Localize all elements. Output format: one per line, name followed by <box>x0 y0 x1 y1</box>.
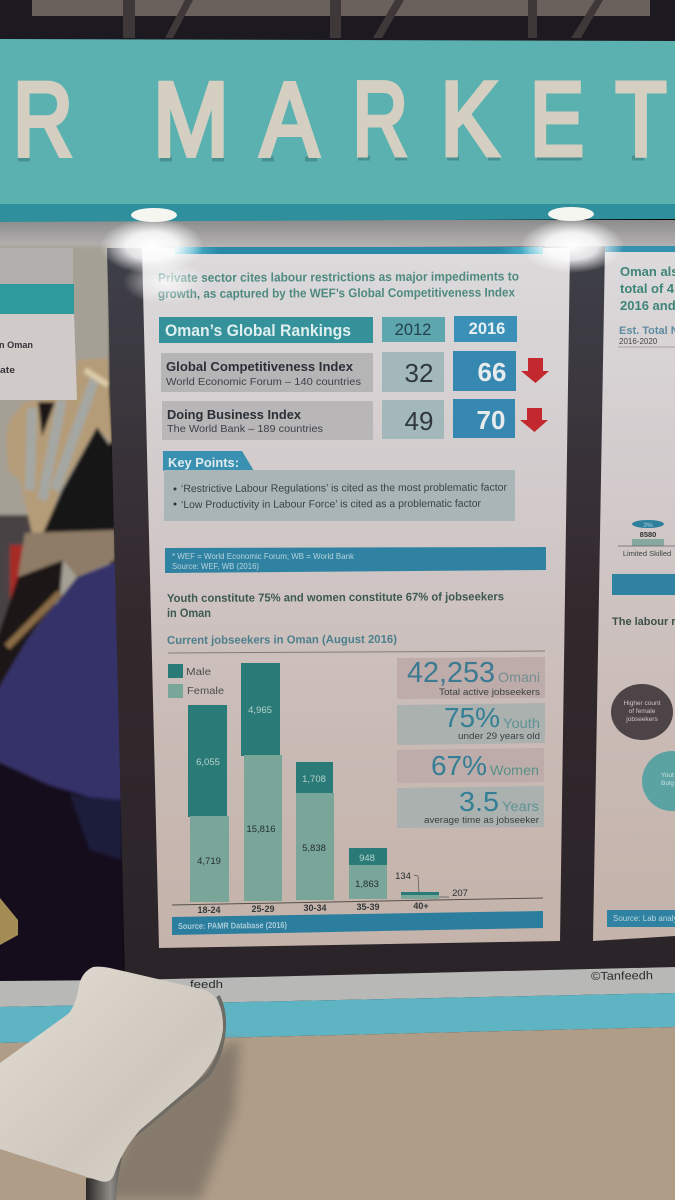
age axis labels: 25-29 <box>251 904 275 914</box>
bar chart: jobseekers by age <box>168 663 543 915</box>
bubble: youth bulge: Bulg <box>661 780 674 787</box>
icon: brass object on left <box>0 898 18 945</box>
sign: teal fascia with lettering <box>0 39 675 222</box>
dark backing frame <box>107 246 675 980</box>
row: Global Competitiveness Index: Global Competitiveness Index <box>166 359 354 374</box>
key points: ‘Low Productivity in Labour Force’ is cited as a problematic factor <box>181 498 481 511</box>
left poster: text callout: n Oman <box>0 340 33 351</box>
right panel: The labour r <box>612 616 675 628</box>
sign lettering: R <box>13 62 73 178</box>
bar: 18-24: 6,055 <box>196 757 220 768</box>
right panel bar: limited skilled: Limited Skilled <box>623 549 671 558</box>
stat: total jobseekers: Total active jobseekers <box>439 687 540 698</box>
stat: total jobseekers <box>397 657 545 699</box>
stool shadow <box>100 1040 240 1200</box>
bar: 35-39: 1,863 <box>355 879 379 890</box>
teal floor band <box>0 993 675 1043</box>
key points: ‘Restrictive Labour Regulations’ is cited as the most problematic factor <box>181 482 507 495</box>
bar: 40+ <box>395 871 468 899</box>
age axis labels: 40+ <box>413 901 429 911</box>
bottom caption strip <box>0 967 675 1007</box>
bottom caption strip: feedh <box>190 979 223 991</box>
stat: total jobseekers: Omani <box>498 669 540 685</box>
bar: 30-34: 5,838 <box>302 843 326 854</box>
intro text: Private sector cites labour restrictions as major impediments to <box>158 269 519 285</box>
lamp: left <box>131 208 177 222</box>
bubble: youth bulge: Yout <box>661 772 674 779</box>
legend: Female <box>187 685 224 697</box>
dark lower background <box>0 760 125 985</box>
row: Doing Business Index: 49 <box>405 406 433 436</box>
intro text <box>158 269 519 301</box>
right panel: 2016-2020 <box>619 337 658 346</box>
right panel bar: limited skilled: 3% <box>643 522 653 529</box>
row: Doing Business Index <box>162 399 548 440</box>
right panel source bar <box>607 910 675 927</box>
table header <box>159 316 517 343</box>
bubble: youth bulge <box>642 751 675 811</box>
bottom caption strip: ©Tanfeedh <box>591 970 653 983</box>
lamp glow on wall and posters <box>100 218 624 304</box>
bubble: female jobseekers: of female <box>629 708 656 715</box>
row: Global Competitiveness Index <box>161 351 549 392</box>
source bar: WEF, WB: Source: WEF, WB (2016) <box>172 561 259 571</box>
left poster: text callout <box>0 248 77 400</box>
bar: 25-29 <box>241 663 282 901</box>
stat: years: 3.5 <box>459 786 499 817</box>
lamp: right <box>548 207 594 221</box>
lower scarf <box>18 530 116 577</box>
table header: 2016 <box>469 320 505 338</box>
source bar: PAMR: Source: PAMR Database (2016) <box>178 920 287 931</box>
row: Global Competitiveness Index: 32 <box>405 358 433 388</box>
top accent bar <box>175 247 543 254</box>
bar: 35-39 <box>349 848 387 899</box>
beige lower wall <box>0 1027 675 1200</box>
stat: years: average time as jobseeker <box>424 815 539 826</box>
bar: 30-34: 1,708 <box>302 774 326 785</box>
source bar: WEF, WB <box>165 547 546 573</box>
bar: 35-39: 948 <box>359 853 375 864</box>
right panel bar: limited skilled <box>618 520 675 558</box>
heading: youth and women: Youth constitute 75% and women constitute 67% of jobseekers <box>167 591 504 605</box>
age axis labels: 18-24 <box>197 905 221 915</box>
bar: 25-29: 15,816 <box>246 824 276 835</box>
bar: 40+: 134 <box>395 871 411 882</box>
bar: 25-29: 4,965 <box>248 705 272 716</box>
chart title: Current jobseekers in Oman (August 2016) <box>167 634 397 647</box>
heading: youth and women: in Oman <box>167 608 211 620</box>
row: Doing Business Index: Doing Business Index <box>167 407 302 422</box>
sign lettering: A <box>260 62 318 178</box>
bar: 30-34 <box>296 762 334 900</box>
sign lettering: K <box>440 61 498 178</box>
right panel headings: total of 4 <box>620 281 675 296</box>
right panel headings <box>620 264 675 313</box>
black under-scarf <box>43 427 116 533</box>
stat: youth: 75% <box>444 702 500 733</box>
stat: years: Years <box>502 798 539 814</box>
stat: women <box>397 748 544 783</box>
sign lettering <box>13 61 666 178</box>
source bar: PAMR <box>172 911 543 935</box>
ceiling <box>0 0 675 42</box>
white stool <box>0 967 224 1200</box>
row: Doing Business Index: The World Bank – 189 countries <box>167 423 323 435</box>
table header: Oman’s Global Rankings <box>165 321 351 340</box>
centre panel <box>142 247 570 948</box>
icon: red down arrow <box>520 408 548 432</box>
intro text: growth, as captured by the WEF’s Global Competitiveness Index <box>158 285 515 301</box>
bar: 18-24 <box>188 705 229 902</box>
right panel headings: 2016 and <box>620 298 675 313</box>
bar: 40+: 207 <box>452 888 468 899</box>
stool chrome edge <box>135 996 224 1135</box>
stool leg <box>86 1130 130 1200</box>
sign lettering: R <box>352 61 408 178</box>
head scarf <box>6 358 113 533</box>
sign lettering: E <box>530 61 584 178</box>
row: Global Competitiveness Index: World Economic Forum – 140 countries <box>166 376 361 388</box>
bubble: female jobseekers: jobseekers <box>625 716 658 723</box>
sign lettering shadow <box>18 158 644 159</box>
left poster: text callout: ate <box>0 365 15 376</box>
legend: Male <box>186 666 211 678</box>
stat: years <box>397 786 544 828</box>
sign lettering: M <box>153 62 229 178</box>
bubble: female jobseekers <box>611 684 673 740</box>
source bar: WEF, WB: * WEF = World Economic Forum; WB = World Bank <box>172 551 355 561</box>
age axis labels: 30-34 <box>303 903 327 913</box>
stool seat <box>0 967 223 1182</box>
stat: women: 67% <box>431 750 487 781</box>
stat: youth: under 29 years old <box>458 731 540 742</box>
row: Global Competitiveness Index: 66 <box>478 357 506 387</box>
age axis labels: 35-39 <box>356 902 380 912</box>
right panel bar: limited skilled: 8580 <box>640 530 656 539</box>
wall beneath sign <box>0 220 675 250</box>
icon: red down arrow <box>521 358 549 383</box>
table header: 2012 <box>395 321 431 339</box>
stat: youth <box>397 702 545 745</box>
key points: Key Points: <box>168 455 239 470</box>
heading: youth and women <box>167 591 504 620</box>
bar: 18-24: 4,719 <box>197 856 221 867</box>
jacket <box>0 558 124 830</box>
black scarf fold <box>0 560 63 695</box>
key points <box>163 451 515 521</box>
stat: women: Women <box>490 762 539 778</box>
stat: youth: Youth <box>503 715 540 731</box>
stat: total jobseekers: 42,253 <box>407 657 495 689</box>
age axis labels <box>197 901 429 915</box>
legend <box>168 664 224 698</box>
left poster: photo of woman <box>0 246 125 986</box>
rankings table <box>159 316 549 440</box>
right panel <box>593 246 675 941</box>
bubble: female jobseekers: Higher count <box>624 700 661 707</box>
row: Doing Business Index: 70 <box>477 405 505 435</box>
gold scarf strip <box>7 593 60 647</box>
